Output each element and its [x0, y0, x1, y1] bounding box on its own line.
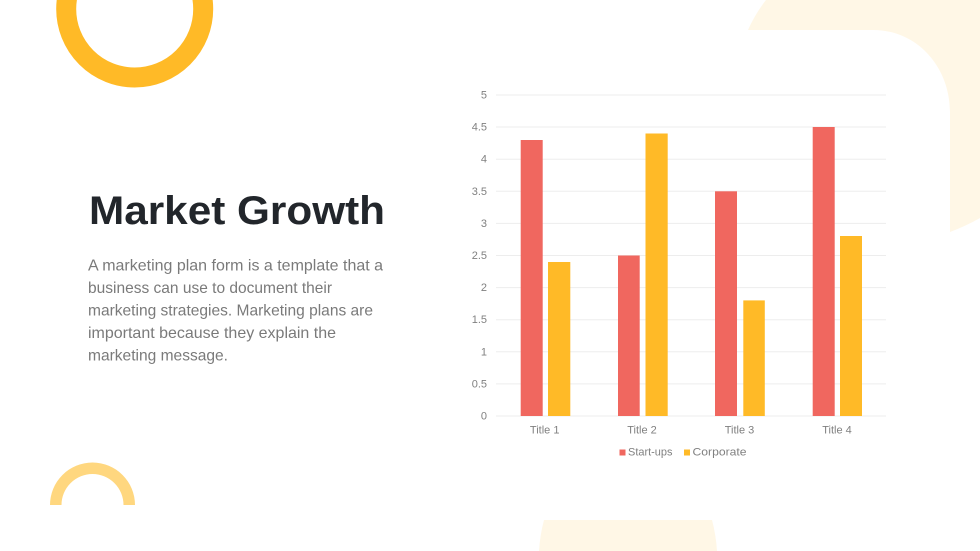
decorative arc: bottom-left — [50, 462, 135, 505]
y-axis labels: 5 — [481, 90, 487, 102]
y-axis labels: 2 — [481, 282, 487, 294]
y-axis labels: 2.5 — [472, 250, 487, 262]
legend — [620, 446, 746, 458]
x-axis labels: Title 3 — [725, 424, 754, 436]
title: Market Growth — [89, 189, 385, 233]
bar chart — [472, 90, 886, 458]
x-axis labels — [530, 424, 852, 436]
y-axis labels — [472, 90, 487, 422]
y-axis labels: 1.5 — [472, 314, 487, 326]
decorative shape: top-right cream blob — [748, 0, 980, 232]
body text: important because they explain the — [88, 325, 336, 342]
y-axis labels: 4.5 — [472, 122, 487, 134]
x-axis labels: Title 4 — [822, 424, 852, 436]
body text: marketing strategies. Marketing plans are — [88, 303, 373, 320]
body text: A marketing plan form is a template that a — [88, 258, 383, 275]
y-axis labels: 4 — [481, 154, 487, 166]
decorative ring: top-left — [66, 0, 203, 78]
x-axis labels: Title 1 — [530, 424, 559, 436]
series: Corporate bars — [548, 134, 862, 416]
legend: Start-ups — [628, 446, 673, 458]
y-axis labels: 1 — [481, 346, 487, 358]
body text — [88, 258, 383, 364]
y-axis labels: 3.5 — [472, 186, 487, 198]
y-axis labels: 3 — [481, 218, 487, 230]
decorative shape: bottom cream blob — [539, 520, 717, 551]
x-axis labels: Title 2 — [627, 424, 657, 436]
body text: business can use to document their — [88, 280, 333, 297]
legend: Corporate — [692, 446, 746, 458]
y-axis labels: 0.5 — [472, 378, 487, 390]
body text: marketing message. — [88, 347, 228, 364]
series: Start-ups bars — [521, 127, 835, 416]
y-axis labels: 0 — [481, 410, 487, 422]
